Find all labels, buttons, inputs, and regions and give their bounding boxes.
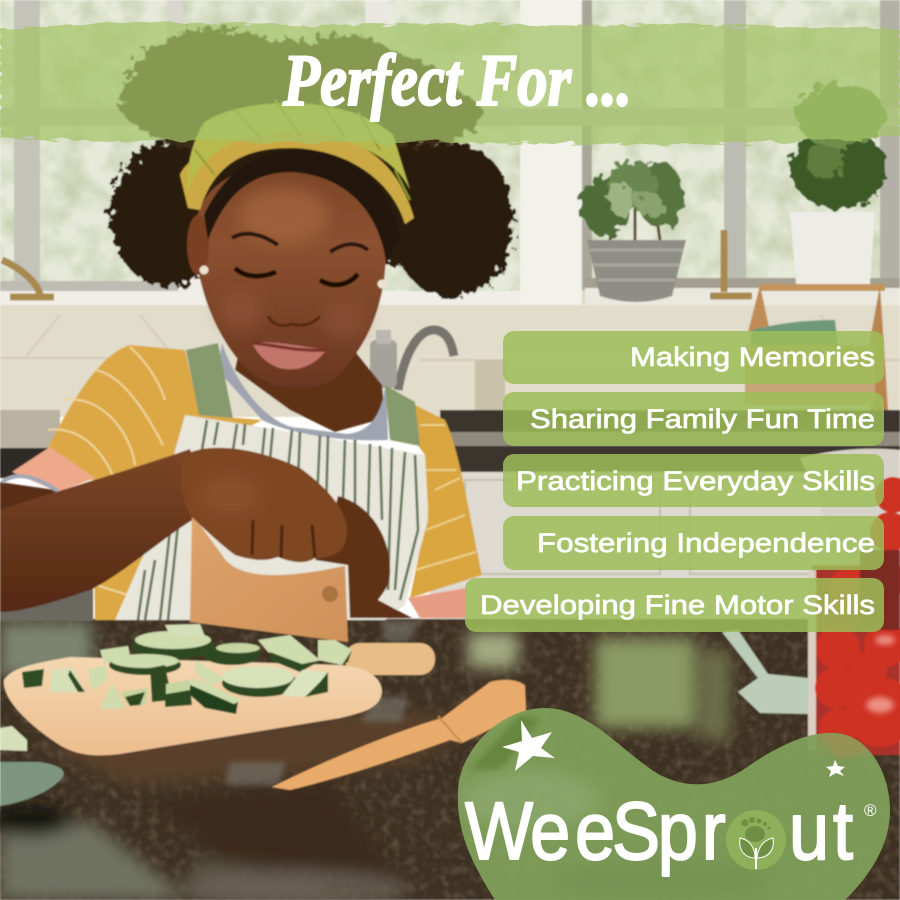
list item: Developing Fine Motor Skills: Developing Fine Motor Skills [480,590,875,620]
title banner [0,23,900,145]
hand on knife [181,448,347,562]
eyebrows and eyes [232,234,368,252]
logo: WeeSprout [458,708,890,900]
ears [187,215,209,275]
pink lower sleeve [408,588,466,618]
nose [268,316,320,326]
hair [110,28,514,298]
second hand [315,496,412,618]
tomato jar [800,449,900,755]
knuckle highlight [200,475,260,515]
title: Perfect For ... [282,40,632,122]
backsplash [0,305,900,450]
shirt right [385,400,482,598]
window frames [0,0,900,311]
wooden caddy [745,284,888,410]
brass tap left [2,260,54,297]
faucet [370,330,454,390]
large star [502,720,555,771]
small wooden knife [272,680,526,790]
potted plant right [790,83,886,284]
list item: Practicing Everyday Skills: Practicing Everyday Skills [516,466,875,496]
girl: body [0,100,482,642]
logo o emblem [726,810,786,870]
countertop [0,619,900,900]
headband braid [187,103,410,190]
apron straps [186,343,233,418]
list item: Developing Fine Motor Skills [465,578,884,632]
cheek highlights [218,290,262,330]
cucumbers [22,624,352,714]
wordmark left: WeeSpr [465,786,726,877]
small star [826,760,845,777]
shirt left [33,345,262,620]
list item: Fostering Independence: Fostering Independence [537,528,875,558]
braid lines [195,100,410,200]
blob tonal patches [462,714,868,830]
head [195,165,386,388]
apron stripes [138,420,418,620]
headband lower [180,130,414,224]
list item: Sharing Family Fun Time [503,392,884,446]
wordmark right: ut [789,786,853,877]
list item: Making Memories [503,331,884,384]
logo backdrop blob [458,708,890,900]
apron reflection [225,620,422,785]
list item: Practicing Everyday Skills [503,454,884,507]
cabinet panel lines [465,480,880,574]
list item: Sharing Family Fun Time: Sharing Family Fun Time [530,404,875,434]
grey wall below arm [0,575,93,621]
pink sleeve [12,447,95,492]
knife emblem [322,586,338,602]
neck [235,345,385,432]
green plate [0,762,64,806]
cabinets [430,472,900,622]
mouth [252,342,326,369]
list item: Making Memories: Making Memories [630,342,875,372]
list item: Fostering Independence [503,516,884,570]
spatula [722,630,808,714]
forehead highlight [238,187,328,243]
sleeve trim [2,476,58,491]
cutting board [4,643,435,755]
countertop back [0,410,900,478]
brass tap right [710,230,752,296]
shirt stripes [48,347,165,595]
registered mark: ® [864,801,877,820]
back arm [0,482,90,560]
cucumber chunk left [0,726,27,751]
collar [218,343,388,440]
wooden knife blade [190,514,348,642]
potted plant centre [579,160,686,302]
window scenery [0,0,900,310]
hairline [204,150,400,262]
arm left [0,449,210,612]
apron [115,415,428,620]
